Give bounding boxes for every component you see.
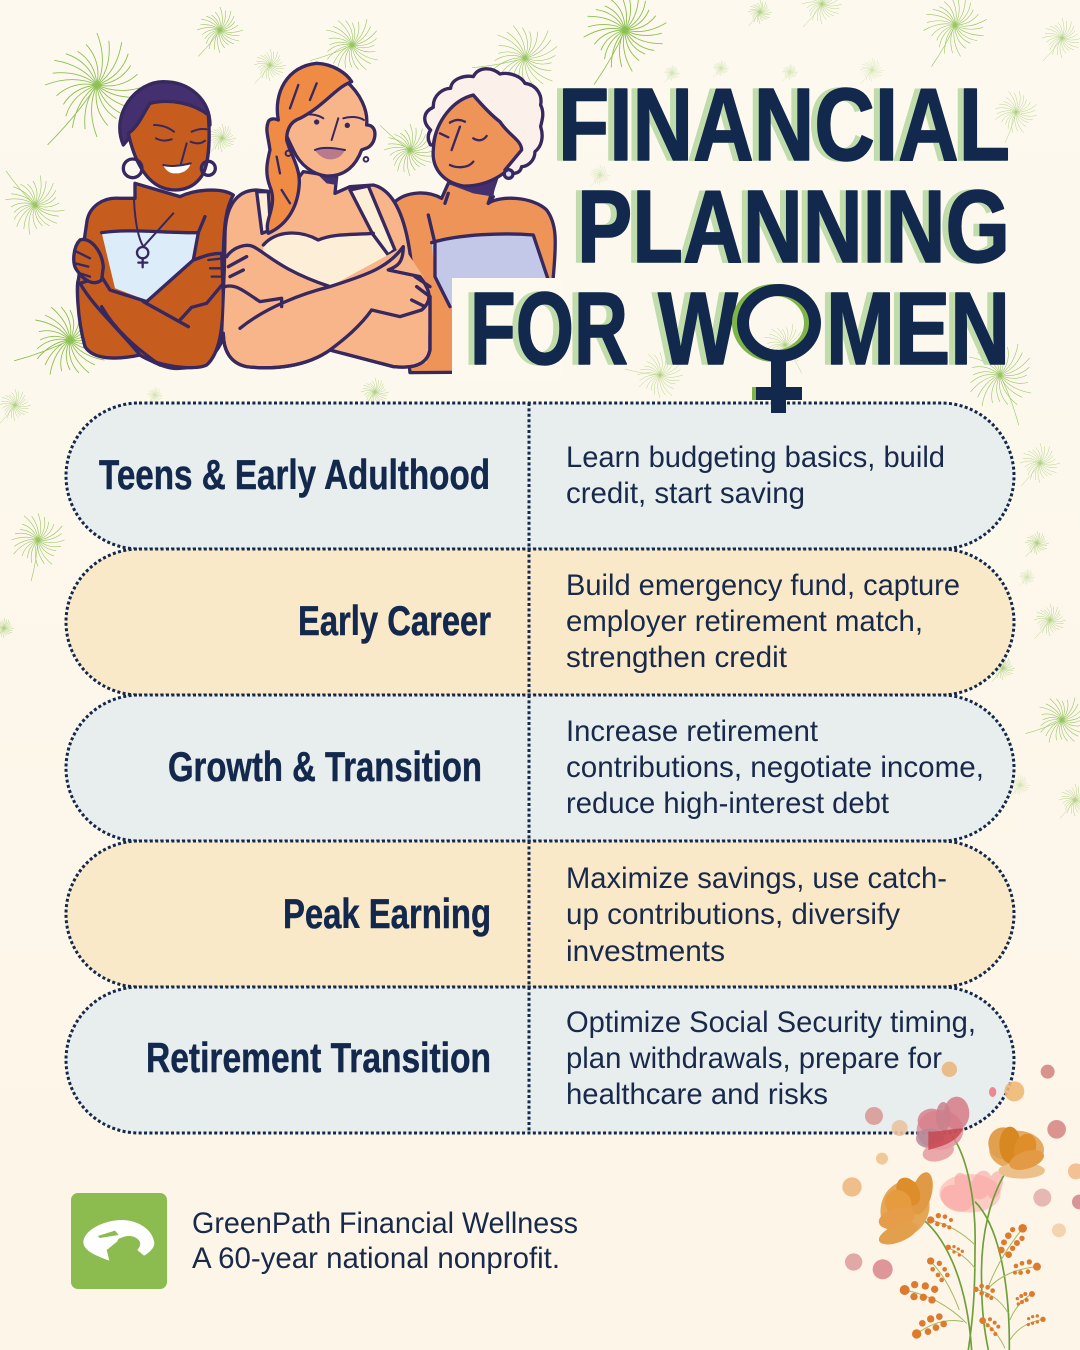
title: FOR: [470, 271, 628, 386]
row 4: Peak Earning: up contributions, diversify: [566, 898, 900, 931]
row 5: Retirement Transition: Optimize Social Security timing,: [566, 1006, 976, 1039]
illustration: three women with crossed arms: [74, 63, 555, 373]
row 4: Peak Earning: [66, 841, 1014, 987]
title shadow: MEN: [820, 271, 1004, 386]
row 5: Retirement Transition: Retirement Transition: [146, 1034, 491, 1081]
timeline rows: [66, 403, 1014, 1133]
red flower: [916, 1097, 969, 1165]
row 2: Early Career: employer retirement match,: [566, 605, 923, 638]
row 1: Teens & Early Adulthood: Learn budgeting basics, build: [566, 441, 945, 474]
row 1: Teens & Early Adulthood: [66, 403, 1014, 549]
stems: [918, 1137, 1011, 1350]
title shadow: [464, 67, 1004, 386]
woman: left, short purple hair: [74, 82, 233, 368]
berry sprigs: [900, 1213, 1046, 1348]
woman: centre, red hair: [223, 63, 430, 368]
row 1: Teens & Early Adulthood: credit, start saving: [566, 477, 805, 510]
title: W: [658, 271, 739, 386]
pink flower: [936, 1168, 1006, 1217]
row 5: Retirement Transition: [66, 987, 1014, 1133]
row 4: Peak Earning: investments: [566, 935, 725, 968]
row 2: Early Career: strengthen credit: [566, 641, 788, 674]
row 4: Peak Earning: Maximize savings, use catch-: [566, 862, 947, 895]
footer logo: [71, 1193, 167, 1289]
red hair: [267, 63, 352, 233]
floating dots: [842, 1062, 1080, 1279]
footer text: GreenPath Financial Wellness: [192, 1207, 578, 1240]
row 2: Early Career: Early Career: [298, 597, 491, 644]
footer text: [192, 1207, 578, 1275]
row 3: Growth & Transition: contributions, negotiate income,: [566, 751, 984, 784]
row 3: Growth & Transition: reduce high-interest debt: [566, 787, 890, 820]
title shadow: W: [652, 271, 733, 386]
woman: right, grey hair: [395, 69, 555, 373]
floral decoration: [842, 1062, 1080, 1350]
row 2: Early Career: [66, 549, 1014, 695]
row 1: Teens & Early Adulthood: Teens & Early Adulthood: [99, 451, 490, 498]
title shadow: FOR: [464, 271, 622, 386]
background dandelions: [0, 0, 1080, 821]
row 2: Early Career: Build emergency fund, capture: [566, 569, 960, 602]
orange flower right: [988, 1127, 1046, 1179]
row 3: Growth & Transition: [66, 695, 1014, 841]
row 3: Growth & Transition: Increase retirement: [566, 715, 819, 748]
row 4: Peak Earning: Peak Earning: [283, 890, 491, 937]
title: [470, 67, 1010, 386]
orange flower left: [873, 1170, 937, 1249]
row 5: Retirement Transition: plan withdrawals, prepare for: [566, 1042, 942, 1075]
row 3: Growth & Transition: Growth & Transition: [168, 743, 482, 790]
icon: female symbol forming the O of WOMEN: [738, 290, 815, 413]
title: MEN: [826, 271, 1010, 386]
title backdrop: [452, 278, 562, 378]
footer text: A 60-year national nonprofit.: [192, 1242, 560, 1275]
row 5: Retirement Transition: healthcare and risks: [566, 1078, 828, 1111]
